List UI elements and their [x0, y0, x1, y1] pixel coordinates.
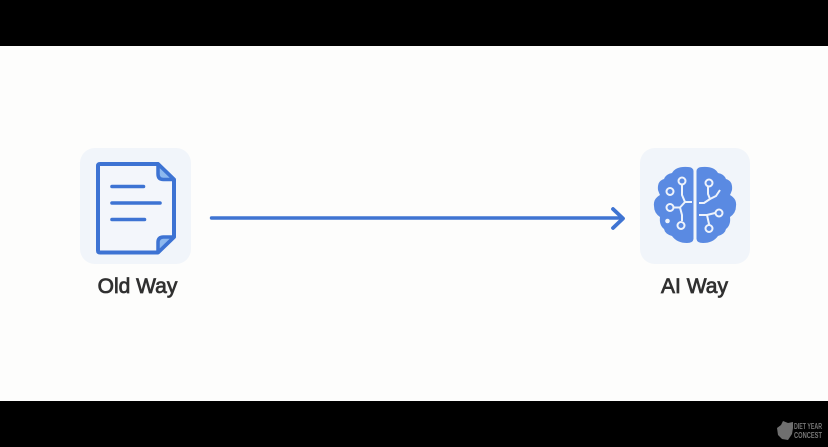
- panel: AI way: [640, 148, 750, 298]
- panel: old way: [80, 148, 191, 298]
- label: old way: Old Way: [98, 275, 178, 298]
- icon: watermark emblem: [777, 421, 793, 440]
- icon: document: [98, 164, 174, 252]
- icon: circuit brain: [654, 167, 736, 243]
- icon tile: AI way: [640, 148, 750, 264]
- panel: white content area: [0, 46, 828, 401]
- icon tile: old way: [80, 148, 191, 264]
- arrow: old way to AI way: [212, 209, 623, 228]
- label: AI way: AI Way: [661, 275, 728, 298]
- watermark: [777, 421, 822, 440]
